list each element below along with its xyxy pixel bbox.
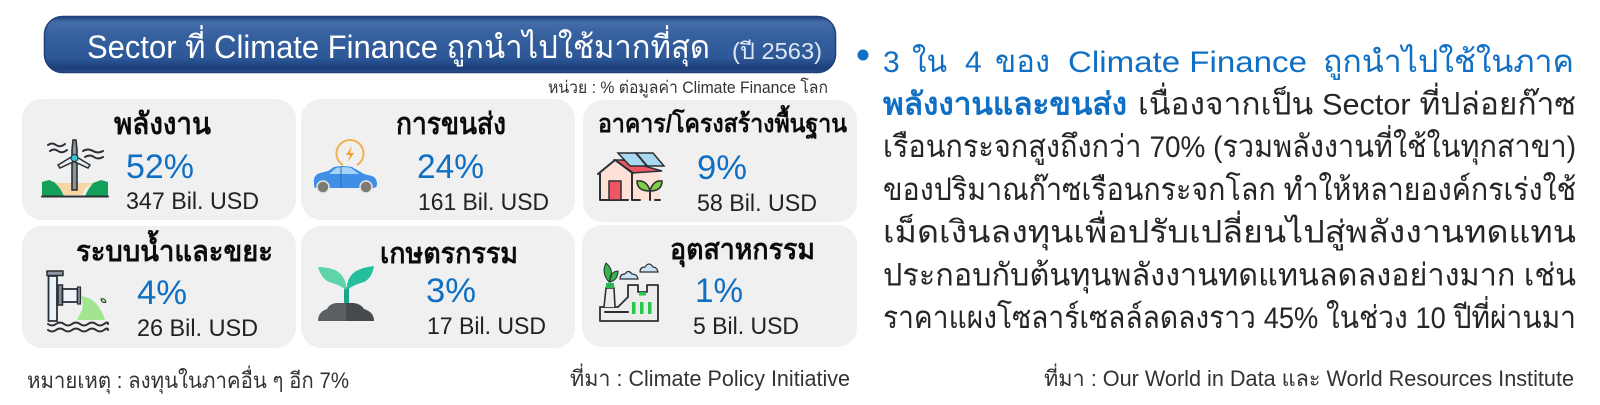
line 1: 4 [965, 46, 982, 79]
panel: industry [582, 225, 857, 347]
water value: 26 Bil. USD [137, 315, 258, 342]
icon: outflow pipe [47, 271, 108, 332]
industry percent: 1% [695, 272, 743, 310]
agriculture value: 17 Bil. USD [427, 313, 546, 340]
industry value: 5 Bil. USD [693, 313, 799, 340]
line 6: ประกอบกับต้นทุนพลังงานทดแทนลดลงอย่างมาก เช่น [883, 258, 1576, 294]
panel: buildings and infrastructure [583, 100, 857, 222]
buildings heading: อาคาร/โครงสร้างพื้นฐาน [598, 104, 847, 140]
title banner [44, 16, 836, 72]
source: right panel: ที่มา : Our World in Data และ World Resources Institute [1044, 363, 1574, 391]
buildings percent: 9% [697, 149, 747, 187]
title heading: Sector ที่ Climate Finance ถูกนำไปใช้มากที่สุด [87, 25, 710, 67]
icon: green factory [600, 263, 658, 321]
energy heading: พลังงาน [114, 108, 211, 141]
unit note: หน่วย : % ต่อมูลค่า Climate Finance โลก [548, 77, 828, 98]
agriculture percent: 3% [426, 272, 476, 310]
icon: electric car [314, 140, 377, 193]
icon: house with solar panels [598, 153, 664, 200]
energy percent: 52% [126, 148, 194, 186]
line 1: 3 [883, 46, 900, 79]
industry heading: อุตสาหกรรม [670, 234, 815, 267]
line 1: ใน [912, 44, 947, 79]
title year note: (ปี 2563) [732, 38, 822, 64]
line 1 [883, 44, 1574, 80]
panel: energy [22, 99, 296, 220]
panel: transport [301, 99, 575, 220]
line 7: ราคาแผงโซลาร์เซลล์ลดลงราว 45% ในช่วง 10 ปีที่ผ่านมา [883, 296, 1576, 335]
line 1: Climate Finance [1068, 46, 1307, 79]
line 2 highlight: พลังงานและขนส่ง [883, 86, 1127, 122]
line 1: ของ [995, 44, 1050, 79]
line 2 remainder: เนื่องจากเป็น Sector ที่ปล่อยก๊าซ [1138, 82, 1576, 122]
line 1: ถูกนำไปใช้ในภาค [1323, 44, 1574, 80]
line 3: เรือนกระจกสูงถึงกว่า 70% (รวมพลังงานที่ใช้ในทุกสาขา) [883, 125, 1576, 166]
water percent: 4% [137, 274, 187, 312]
transport heading: การขนส่ง [396, 108, 506, 141]
source: left panel: ที่มา : Climate Policy Initiative [570, 363, 850, 391]
footnote: หมายเหตุ : ลงทุนในภาคอื่น ๆ อีก 7% [27, 365, 349, 394]
panel: water and waste [22, 226, 296, 348]
icon: wind turbine [42, 140, 108, 196]
transport percent: 24% [417, 148, 484, 186]
line 5: เม็ดเงินลงทุนเพื่อปรับเปลี่ยนไปสู่พลังงานทดแทน [883, 210, 1576, 252]
water heading: ระบบน้ำและขยะ [76, 229, 273, 268]
energy value: 347 Bil. USD [126, 188, 259, 215]
agriculture heading: เกษตรกรรม [380, 238, 518, 270]
transport value: 161 Bil. USD [418, 189, 549, 216]
text block: explanation [883, 44, 1576, 335]
icon: bullet [858, 50, 868, 60]
icon: seedling [318, 266, 374, 321]
buildings value: 58 Bil. USD [697, 190, 817, 217]
panel: agriculture [301, 226, 575, 348]
